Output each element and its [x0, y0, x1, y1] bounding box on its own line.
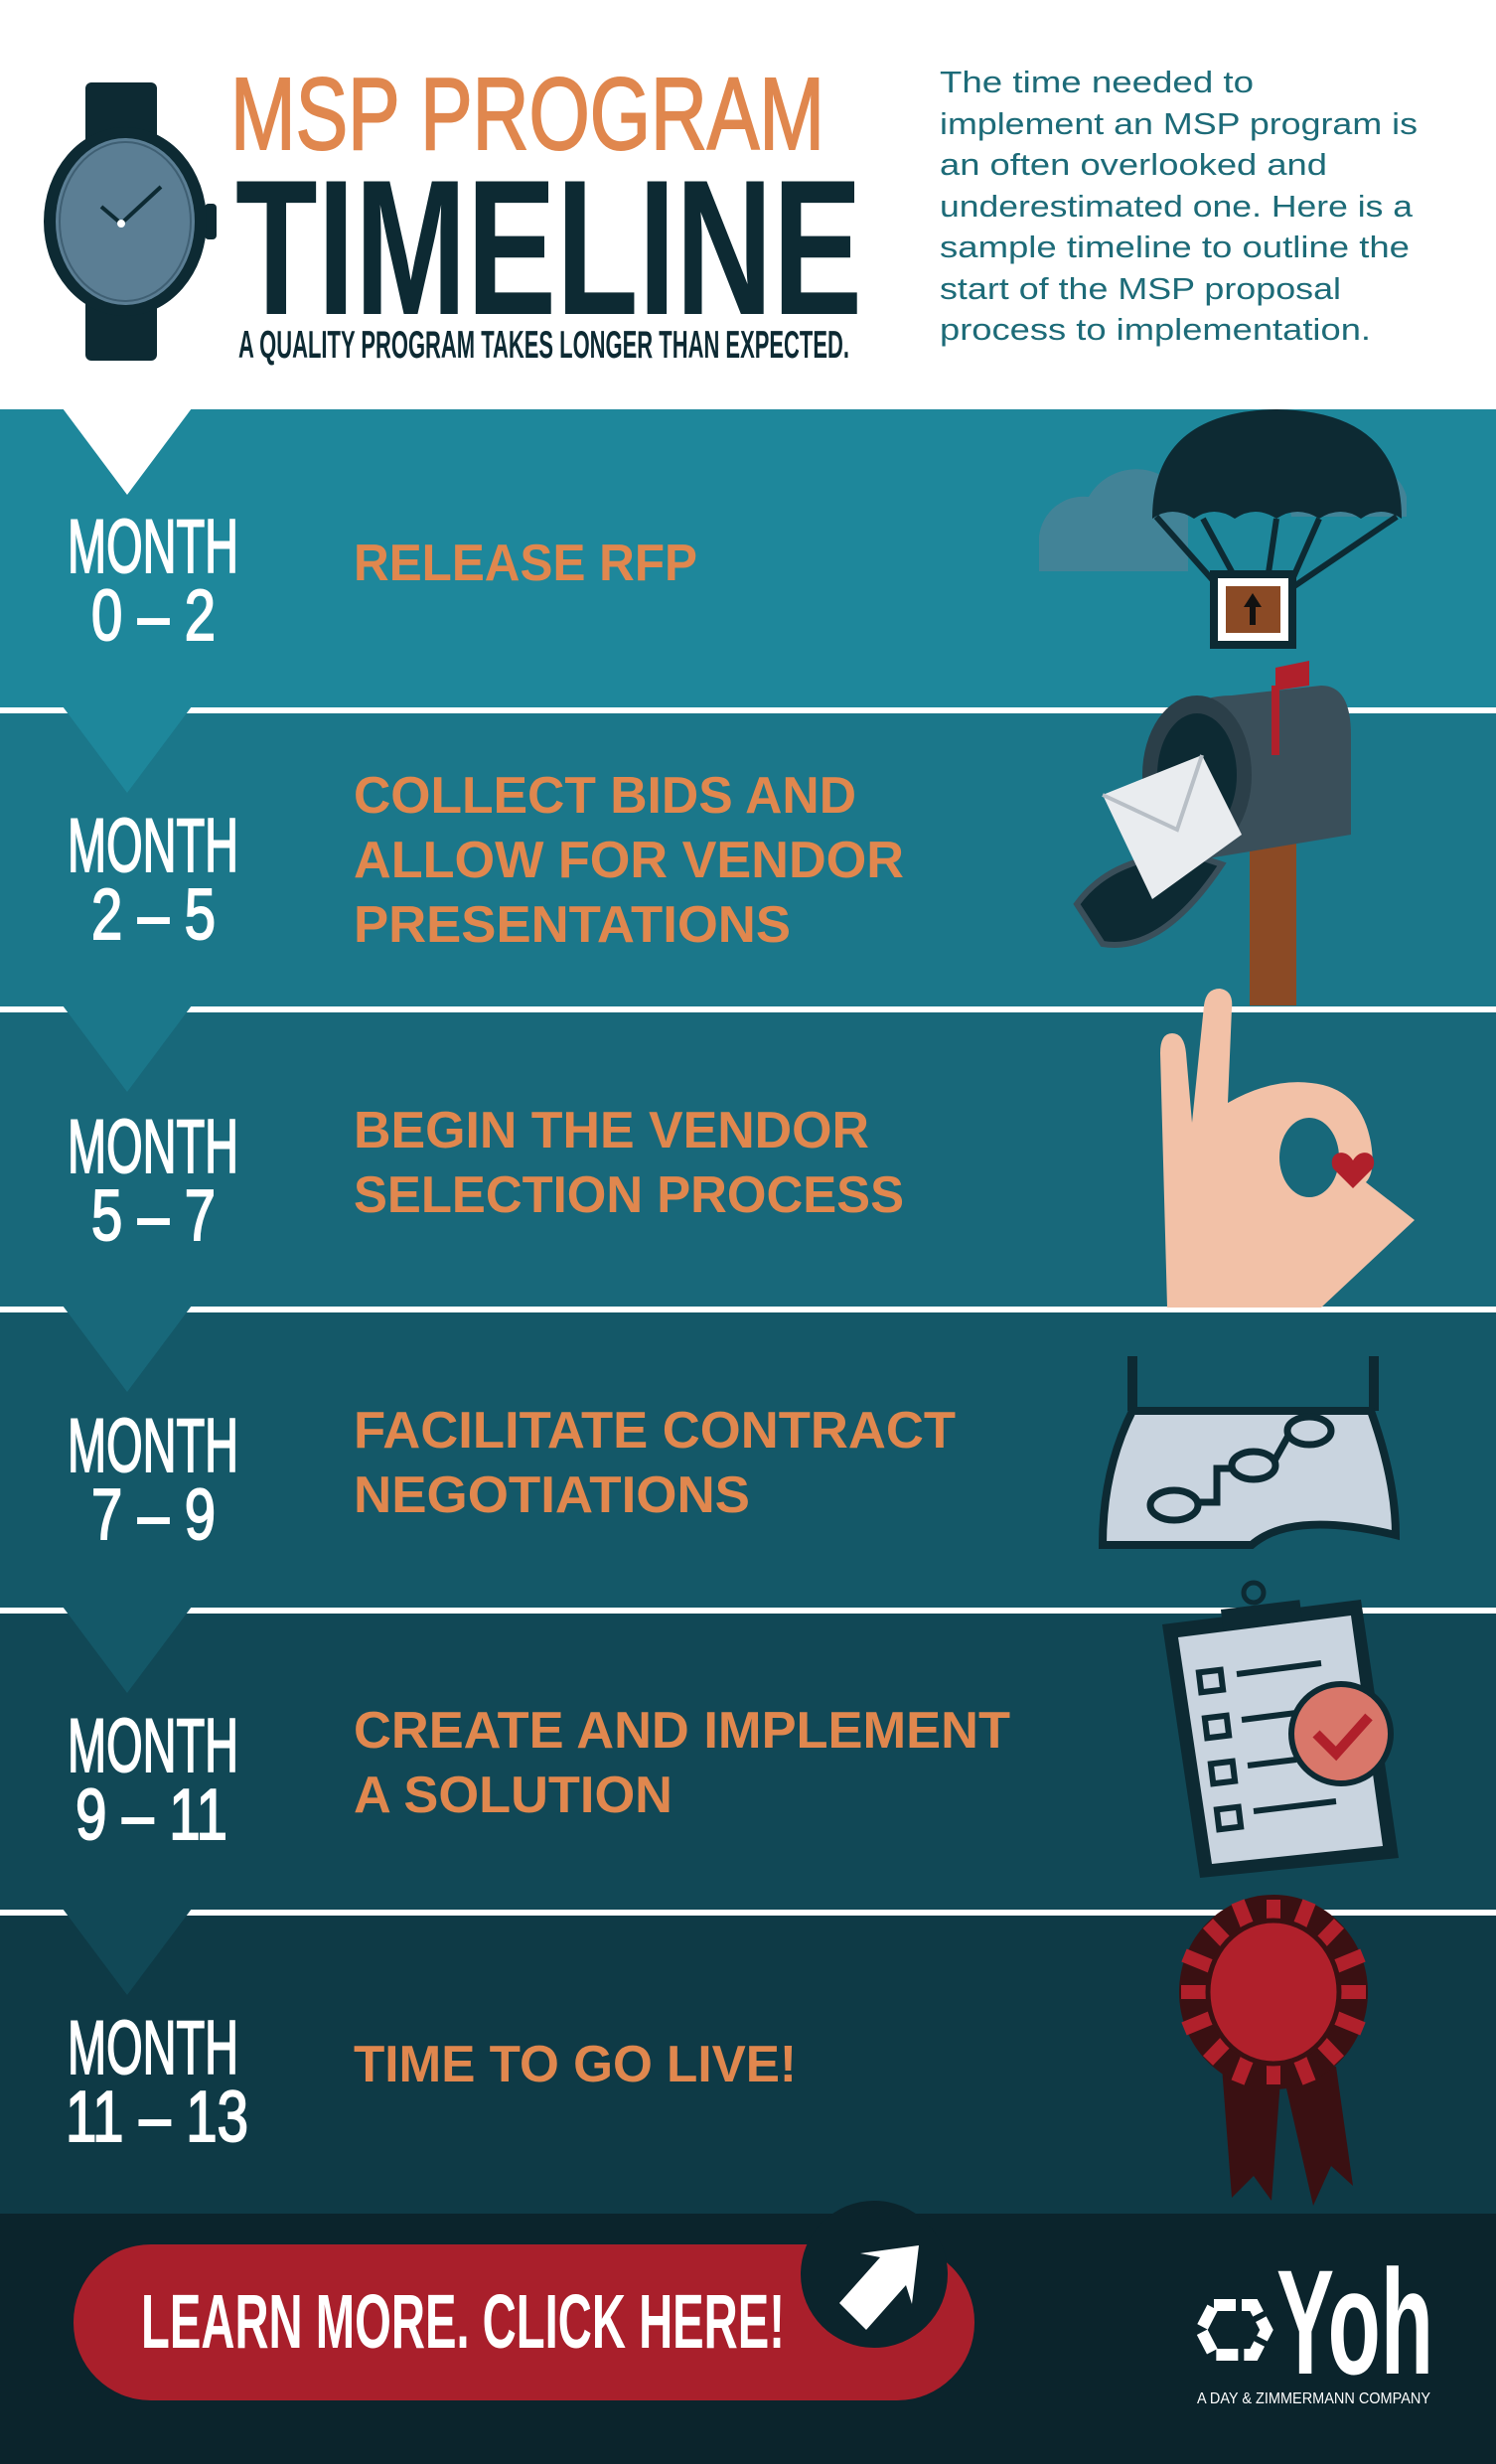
- icon: award ribbon: [1179, 1895, 1368, 2206]
- step 3: month 5-7: [68, 1102, 904, 1256]
- intro paragraph: process to implementation.: [940, 312, 1371, 347]
- icon: parachute with clouds: [1039, 409, 1407, 649]
- icon: mailbox with letter: [1077, 661, 1351, 1005]
- step 3: month 5-7: BEGIN THE VENDOR: [354, 1102, 869, 1159]
- step 2: month 2-5: PRESENTATIONS: [354, 896, 791, 954]
- band 2 background: [0, 710, 1496, 1009]
- title: [230, 57, 862, 356]
- step 6: month 11-13: MONTH: [68, 2006, 238, 2090]
- icon: OK hand with heart: [1160, 989, 1415, 1308]
- call to action button: LEARN MORE. CLICK HERE!: [141, 2279, 785, 2365]
- step 3: month 5-7: 5 – 7: [91, 1176, 216, 1256]
- arrow: pointer into band 3: [63, 1005, 192, 1092]
- intro paragraph: sample timeline to outline the: [940, 230, 1410, 264]
- intro paragraph: an often overlooked and: [940, 147, 1327, 182]
- step 3: month 5-7: SELECTION PROCESS: [354, 1166, 904, 1224]
- step 5: month 9-11: MONTH: [68, 1704, 238, 1788]
- step 4: month 7-9: NEGOTIATIONS: [354, 1466, 750, 1524]
- step 2: month 2-5: COLLECT BIDS AND: [354, 767, 856, 825]
- arrow: pointer into band 2: [63, 706, 192, 793]
- subtitle tagline: A QUALITY PROGRAM TAKES LONGER THAN EXPECTED.: [238, 324, 849, 367]
- step 5: month 9-11: [68, 1702, 1010, 1855]
- step 3: month 5-7: MONTH: [68, 1105, 238, 1189]
- step 5: month 9-11: 9 – 11: [75, 1775, 227, 1855]
- footer background: [0, 2214, 1496, 2464]
- step 1: month 0-2: RELEASE RFP: [354, 535, 697, 592]
- intro paragraph: [940, 65, 1418, 347]
- intro paragraph: The time needed to: [940, 65, 1254, 99]
- step 6: month 11-13: TIME TO GO LIVE!: [354, 2036, 797, 2093]
- step 6: month 11-13: [66, 2006, 797, 2157]
- call to action button: [74, 2201, 974, 2400]
- step 4: month 7-9: MONTH: [68, 1404, 238, 1488]
- band 4 background: [0, 1309, 1496, 1611]
- band 5 background: [0, 1611, 1496, 1913]
- arrow: pointer into band 6: [63, 1909, 192, 1995]
- step 2: month 2-5: [68, 767, 904, 955]
- icon: arrow up-right: [839, 2245, 919, 2330]
- band 1 background: [0, 409, 1496, 710]
- logo: Yoh: [1197, 2238, 1433, 2407]
- logo: Yoh: A DAY & ZIMMERMANN COMPANY: [1197, 2390, 1430, 2407]
- step 2: month 2-5: ALLOW FOR VENDOR: [354, 832, 904, 889]
- step 2: month 2-5: 2 – 5: [91, 875, 216, 955]
- step 6: month 11-13: 11 – 13: [66, 2078, 248, 2157]
- step 4: month 7-9: 7 – 9: [91, 1475, 216, 1555]
- step 1: month 0-2: [68, 505, 697, 656]
- icon: clipboard checklist: [1162, 1583, 1399, 1878]
- title: MSP PROGRAM: [230, 57, 824, 171]
- band 3 background: [0, 1009, 1496, 1309]
- intro paragraph: start of the MSP proposal: [940, 271, 1341, 306]
- icon: watch: [44, 82, 217, 361]
- step 5: month 9-11: A SOLUTION: [354, 1767, 673, 1824]
- intro paragraph: implement an MSP program is: [940, 106, 1418, 141]
- arrow: pointer into band 4: [63, 1306, 192, 1392]
- step 1: month 0-2: MONTH: [68, 505, 238, 589]
- step 5: month 9-11: CREATE AND IMPLEMENT: [354, 1702, 1010, 1760]
- arrow: white pointer into band 1: [63, 408, 192, 495]
- step 1: month 0-2: 0 – 2: [91, 576, 216, 656]
- arrow: pointer into band 5: [63, 1607, 192, 1693]
- intro paragraph: underestimated one. Here is a: [940, 189, 1414, 224]
- step 4: month 7-9: FACILITATE CONTRACT: [354, 1402, 956, 1460]
- step 2: month 2-5: MONTH: [68, 804, 238, 888]
- icon: map with route: [1103, 1356, 1396, 1545]
- step 4: month 7-9: [68, 1402, 956, 1555]
- band 6 background: [0, 1913, 1496, 2214]
- title: TIMELINE: [235, 140, 862, 356]
